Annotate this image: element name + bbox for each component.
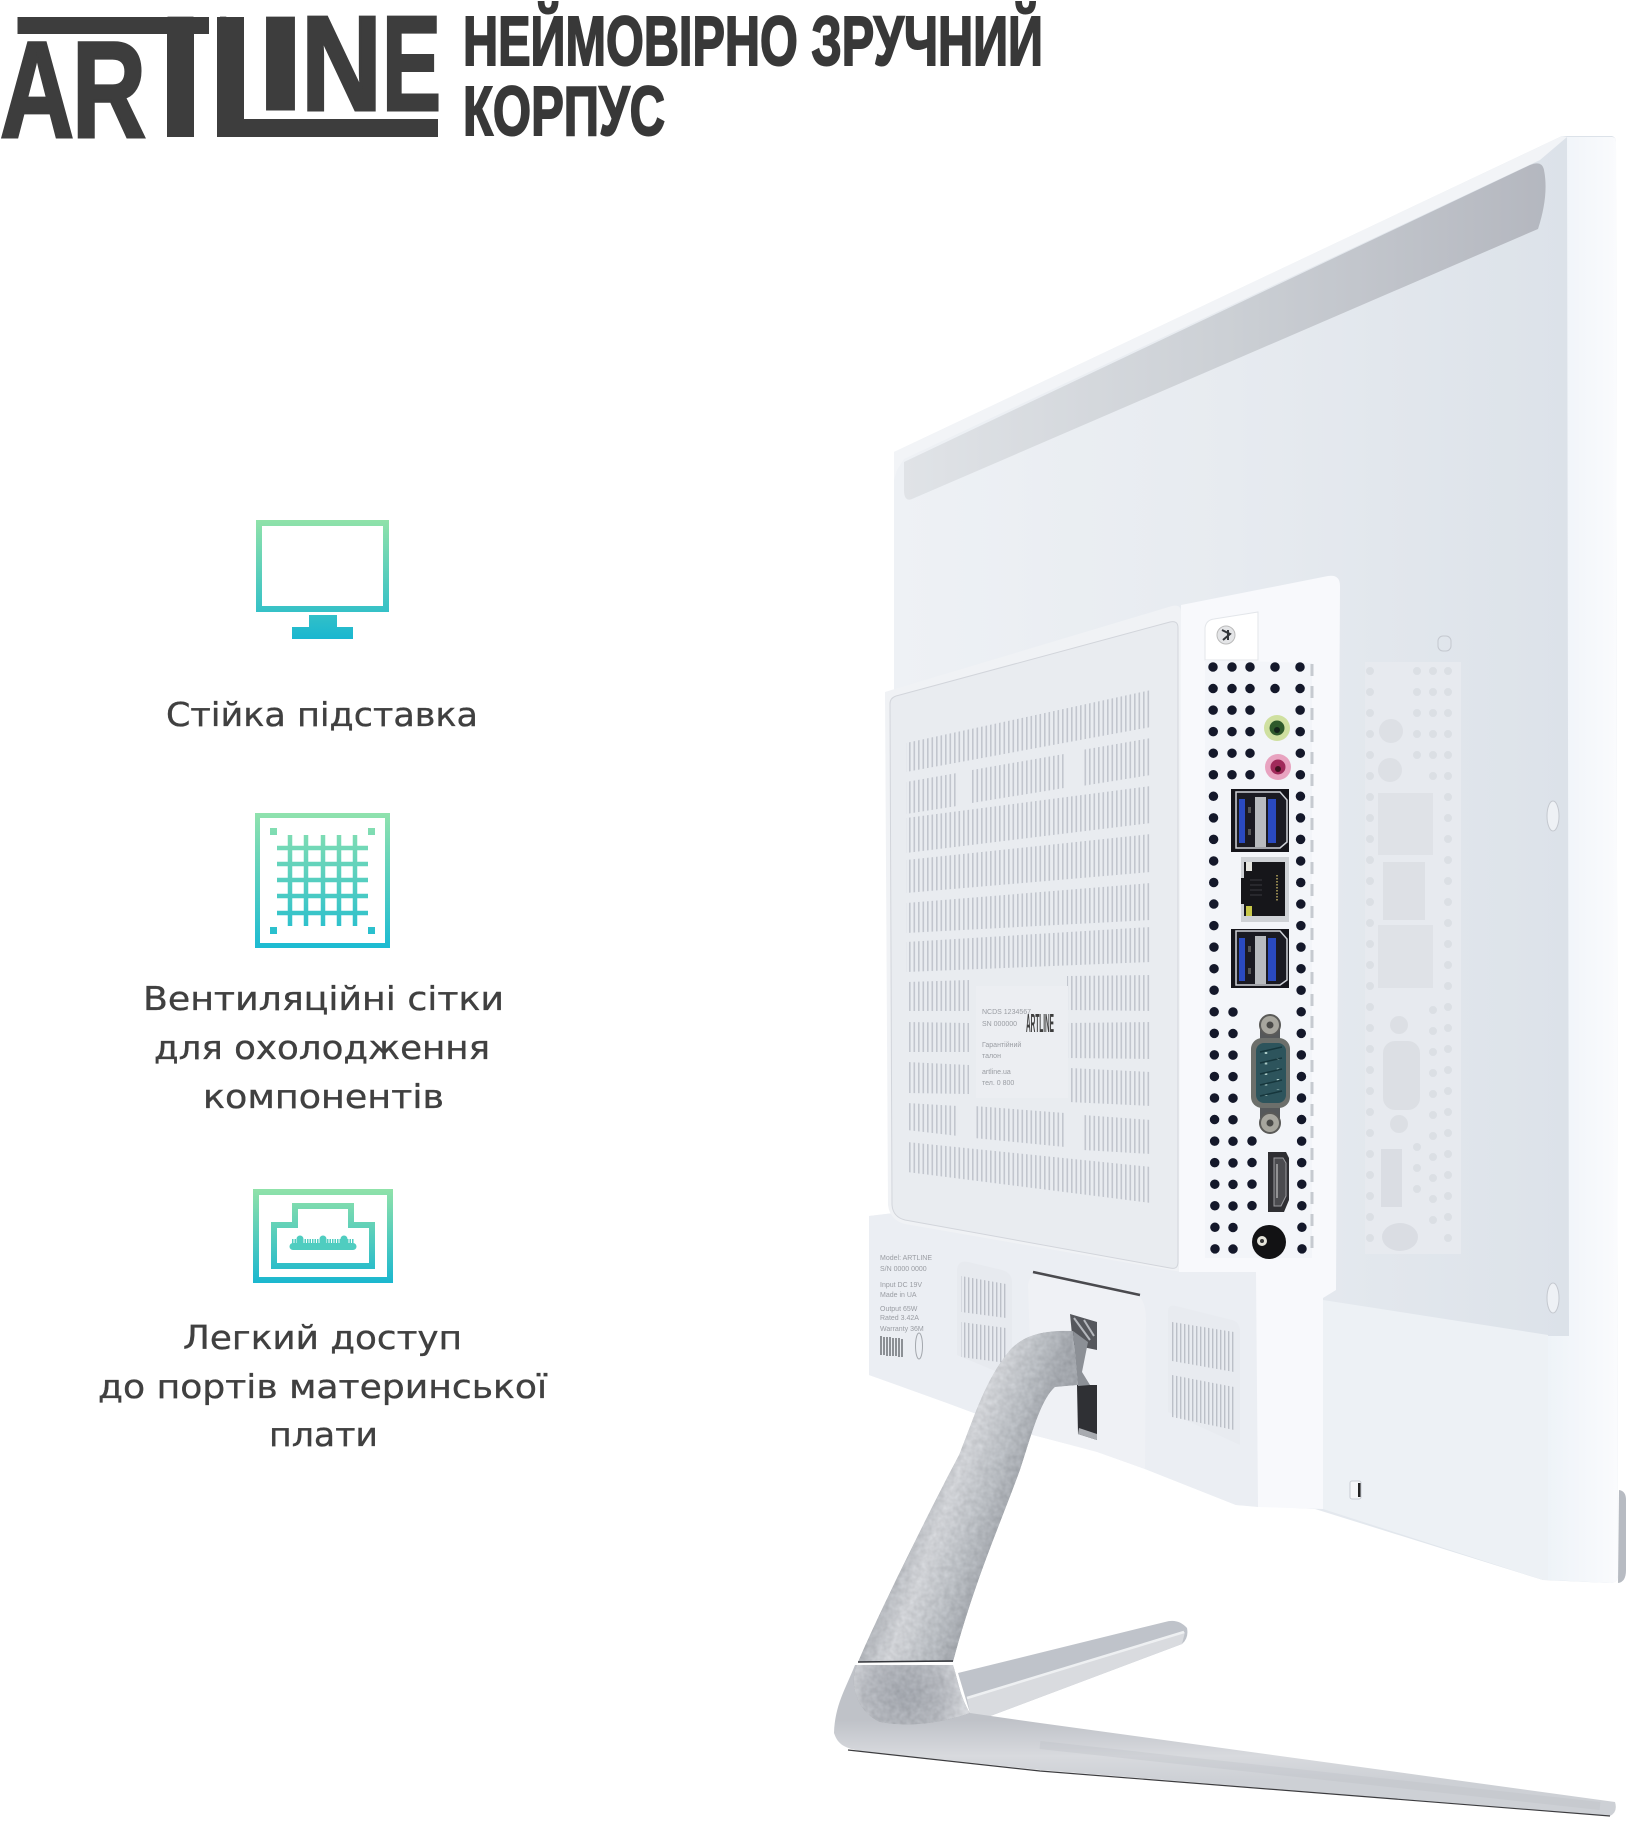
text: easy access to motherboard ports: до портів материнської (98, 1367, 548, 1406)
icon: ventilation grid (258, 816, 388, 946)
title: Неймовірно зручний корпус (463, 1, 1043, 150)
vent cover: ARTLINE (1026, 1008, 1054, 1038)
small screws on the back (1438, 636, 1559, 1313)
icon: port (256, 1192, 390, 1280)
text: ventilation grids for cooling (143, 979, 504, 1116)
DC power jack (1252, 1225, 1286, 1259)
sticker label (976, 986, 1068, 1098)
sticker label: SN 000000 (982, 1021, 1017, 1028)
USB ports top (1231, 789, 1289, 852)
IO plate (1179, 576, 1340, 1509)
stand back leg (958, 1621, 1187, 1718)
rating label: Input DC 19V (880, 1282, 922, 1289)
stand mount cover (1028, 1272, 1146, 1469)
title: Неймовірно зручний корпус: НЕЙМОВІРНО ЗРУЧНИЙ (463, 1, 1043, 80)
stand foot (834, 1665, 1616, 1816)
text: stable stand: Стійка підставка (166, 695, 478, 734)
rating label: S/N 0000 0000 (880, 1266, 927, 1273)
rating label: Made in UA (880, 1292, 917, 1299)
sticker label: тел. 0 800 (982, 1080, 1014, 1087)
text: easy access to motherboard ports: плати (269, 1415, 378, 1454)
sticker label: талон (982, 1053, 1001, 1060)
logo: ARTLINE: A (0, 14, 74, 167)
rating label: Output 65W (880, 1306, 918, 1313)
logo: ARTLINE (0, 0, 441, 175)
right bezel band (1323, 137, 1618, 1583)
logo: ARTLINE: R (72, 14, 146, 167)
rating label: Warranty 36M (880, 1326, 924, 1333)
sticker label: artline.ua (982, 1069, 1011, 1076)
sticker label: Гарантійний (982, 1041, 1021, 1049)
speaker bar (904, 163, 1546, 500)
text: easy access to motherboard ports: Легкий доступ (183, 1318, 462, 1357)
HDMI port (1268, 1152, 1289, 1212)
text: ventilation grids for cooling: компонентів (203, 1077, 444, 1116)
audio jack pink (1265, 754, 1291, 780)
serial COM port (1251, 1015, 1290, 1133)
sticker label: NCDS 1234567 (982, 1009, 1031, 1016)
vent cover (885, 606, 1181, 1272)
ghost IO panel (1365, 662, 1461, 1254)
rating label (880, 1255, 932, 1359)
silver lip (1618, 1490, 1626, 1583)
ethernet port (1241, 857, 1289, 922)
title: Неймовірно зручний корпус: КОРПУС (463, 72, 665, 150)
screw (1217, 626, 1235, 644)
text: ventilation grids for cooling: для охолодження (154, 1028, 490, 1067)
USB ports bottom (1231, 929, 1289, 988)
lower bump vents (957, 1262, 1240, 1445)
product photo: all-in-one back (834, 136, 1626, 1816)
text: ventilation grids for cooling: Вентиляційні сітки (143, 979, 504, 1018)
stand arm (858, 1331, 1090, 1662)
perforated panel (1205, 660, 1312, 1258)
vent slots (906, 690, 1151, 1203)
rating label: Rated 3.42A (880, 1315, 919, 1322)
lock slot (1350, 1481, 1361, 1499)
audio jack green (1264, 715, 1290, 741)
rating label: Model: ARTLINE (880, 1255, 932, 1262)
monitor body (869, 136, 1618, 1583)
text: easy access to motherboard ports (98, 1318, 548, 1454)
icon: monitor (259, 523, 386, 639)
